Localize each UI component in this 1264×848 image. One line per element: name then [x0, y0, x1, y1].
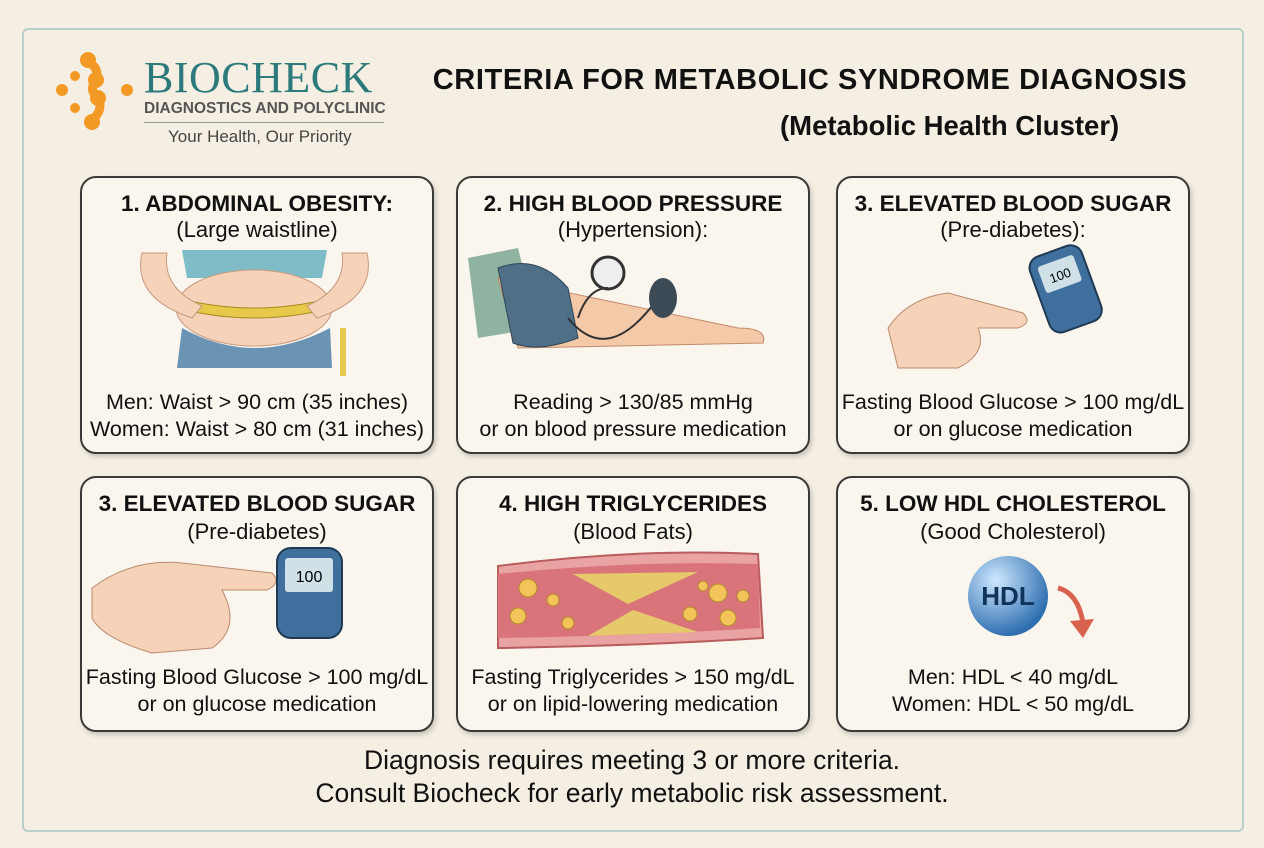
- panel: low HDL: 5. LOW HDL CHOLESTEROL: [860, 491, 1166, 516]
- illustration: glucometer: [92, 547, 343, 654]
- text: (Metabolic Health Cluster): [780, 110, 1119, 141]
- panel: high triglycerides: 4. HIGH TRIGLYCERIDES: [499, 491, 767, 516]
- brand subtitle: DIAGNOSTICS AND POLYCLINIC: [144, 100, 386, 117]
- criteria text: Men: Waist > 90 cm (35 inches): [106, 390, 408, 414]
- footer text: Diagnosis requires meeting 3 or more criteria.: [364, 745, 900, 775]
- panel: high triglycerides: (Blood Fats): [573, 519, 693, 544]
- criteria text: Fasting Blood Glucose > 100 mg/dL: [842, 390, 1184, 414]
- illustration: blood vessel: [497, 552, 764, 649]
- criteria text: [86, 665, 428, 716]
- illustration: glucometer: 100: [1047, 265, 1073, 286]
- panel: elevated blood sugar bottom: 3. ELEVATED BLOOD SUGAR: [99, 491, 415, 516]
- panel: abdominal obesity: 1. ABDOMINAL OBESITY:: [121, 191, 393, 216]
- criteria text: or on lipid-lowering medication: [488, 692, 778, 716]
- panel: elevated blood sugar top: [836, 176, 1190, 454]
- panel: low HDL: [836, 476, 1190, 732]
- criteria text: [90, 390, 424, 441]
- panel: high blood pressure: [456, 176, 810, 454]
- panel: elevated blood sugar bottom: (Pre-diabetes): [187, 519, 327, 544]
- illustration: glucometer: [888, 244, 1103, 368]
- panel: abdominal obesity: (Large waistline): [176, 217, 338, 242]
- criteria text: [471, 665, 795, 716]
- illustration: HDL sphere and arrow: HDL: [981, 581, 1035, 611]
- title: CRITERIA FOR METABOLIC SYNDROME DIAGNOSIS: [433, 64, 1187, 96]
- brand name: BIOCHECK: [144, 53, 373, 102]
- panel: high triglycerides: [456, 476, 810, 732]
- logo: [56, 52, 386, 146]
- panel: high blood pressure: 2. HIGH BLOOD PRESSURE: [484, 191, 782, 216]
- criteria text: [842, 390, 1184, 441]
- title: [433, 64, 1187, 141]
- criteria text: Men: HDL < 40 mg/dL: [908, 665, 1118, 689]
- panel: high blood pressure: (Hypertension):: [558, 217, 708, 242]
- footer text: Consult Biocheck for early metabolic risk assessment.: [315, 778, 949, 808]
- criteria text: Women: HDL < 50 mg/dL: [892, 692, 1134, 716]
- criteria text: Reading > 130/85 mmHg: [513, 390, 753, 414]
- panel: low HDL: (Good Cholesterol): [920, 519, 1106, 544]
- criteria text: or on glucose medication: [893, 417, 1133, 441]
- illustration: BP cuff: [468, 248, 764, 348]
- panel: abdominal obesity: [80, 176, 434, 454]
- criteria text: [892, 665, 1134, 716]
- icon: molecule: [56, 52, 133, 130]
- criteria text: [479, 390, 787, 441]
- criteria text: Women: Waist > 80 cm (31 inches): [90, 417, 424, 441]
- criteria text: or on blood pressure medication: [479, 417, 787, 441]
- illustration: HDL sphere and arrow: [968, 556, 1094, 638]
- illustration: waistline: [140, 250, 369, 376]
- criteria text: Fasting Triglycerides > 150 mg/dL: [471, 665, 795, 689]
- panel: elevated blood sugar top: 3. ELEVATED BLOOD SUGAR: [855, 191, 1171, 216]
- panel: elevated blood sugar top: (Pre-diabetes):: [940, 217, 1086, 242]
- footer text: [315, 745, 949, 808]
- illustration: glucometer: 100: [296, 569, 322, 586]
- panel: elevated blood sugar bottom: [80, 476, 434, 732]
- criteria text: Fasting Blood Glucose > 100 mg/dL: [86, 665, 428, 689]
- tagline: Your Health, Our Priority: [168, 127, 352, 146]
- criteria text: or on glucose medication: [137, 692, 377, 716]
